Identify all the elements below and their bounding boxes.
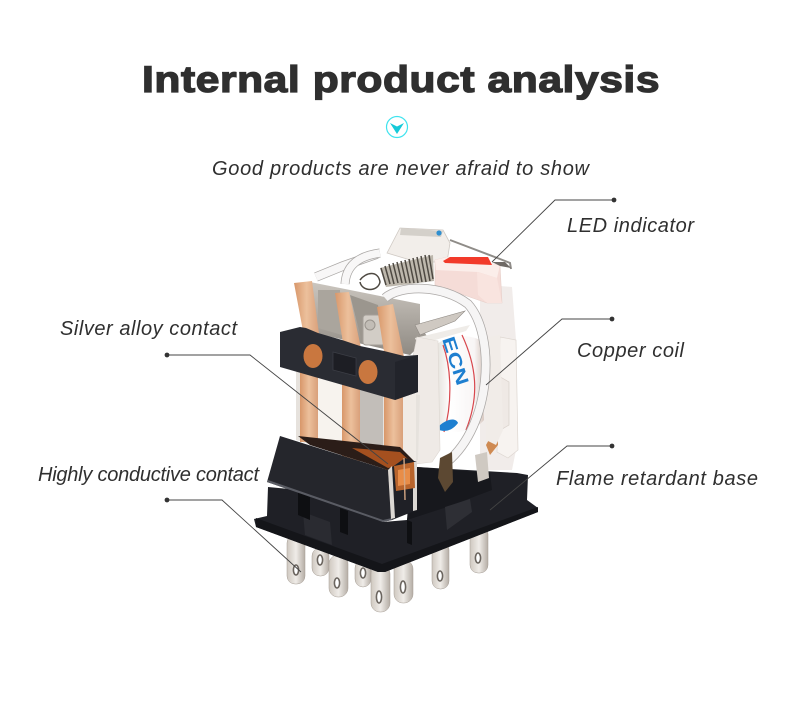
short upper wires [316, 254, 377, 277]
subtitle: Good products are never afraid to show [212, 158, 591, 180]
copper strips lower [300, 368, 318, 442]
metal armature [310, 282, 428, 355]
right rear white column [484, 335, 503, 445]
rear right white frame [480, 285, 518, 470]
label: silver alloy contact: Silver alloy contact [60, 318, 238, 340]
leader: highly conductive contact [165, 498, 301, 572]
red LED [443, 257, 492, 265]
label: copper coil: Copper coil [577, 340, 685, 362]
clear body behind strips [296, 370, 420, 470]
black clamp bar [280, 327, 418, 400]
relay product illustration [254, 228, 538, 612]
pink-white LED housing [435, 257, 502, 303]
leader: LED indicator [492, 198, 616, 262]
white plastic post left of coil [404, 337, 440, 464]
coil brand text: ECN [438, 334, 473, 388]
icon: cyan down arrow in circle [386, 116, 408, 138]
stripped wire end [438, 452, 453, 492]
label: flame retardant base: Flame retardant base [556, 468, 758, 490]
leader: flame retardant base [490, 444, 614, 510]
pins [287, 526, 488, 612]
spring [380, 255, 434, 287]
title: Internal product analysis [142, 60, 659, 100]
label: LED indicator: LED indicator [567, 215, 695, 237]
black socket base [254, 467, 538, 572]
leader: silver alloy contact [165, 353, 388, 464]
copper strips upper tabs [294, 281, 319, 334]
label: highly conductive contact: Highly conductive contact [38, 464, 260, 486]
copper rivets [304, 344, 322, 368]
pin holes [293, 553, 481, 603]
coil [436, 336, 484, 432]
leader: copper coil [486, 317, 614, 385]
black front cover [267, 436, 392, 522]
top white block [387, 228, 450, 262]
copper winding at front [388, 458, 417, 520]
long white wire [385, 289, 486, 462]
